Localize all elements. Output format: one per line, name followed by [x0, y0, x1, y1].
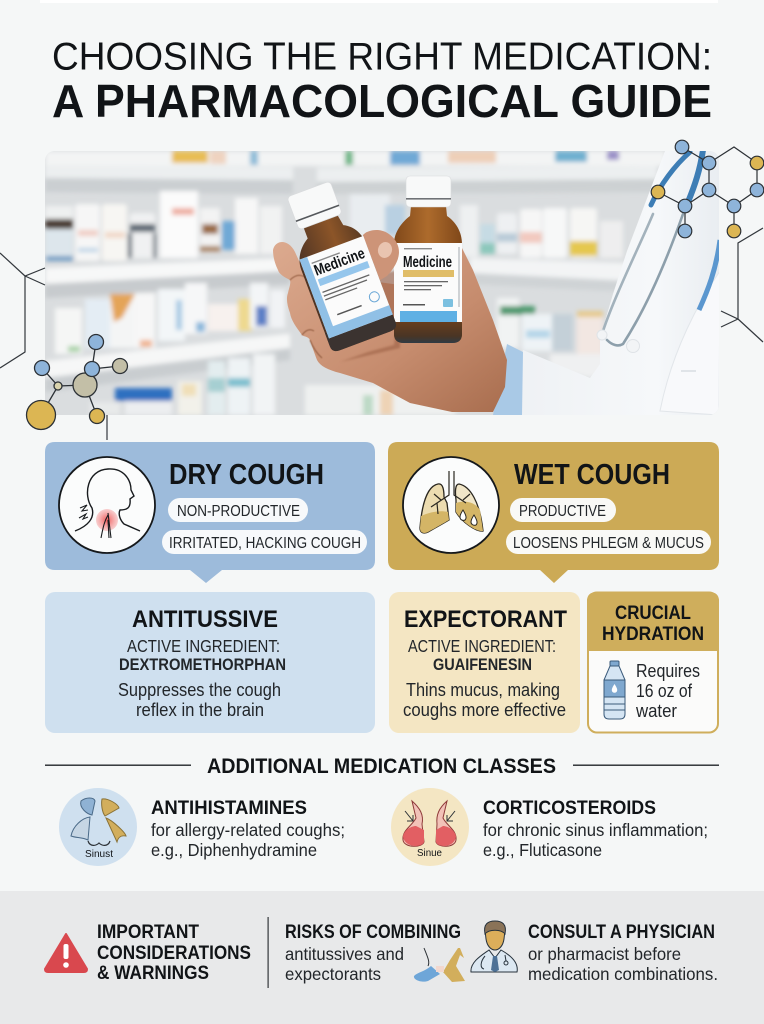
- icon: sinus, blue: [59, 788, 137, 866]
- warning heading: IMPORTANT: [97, 922, 199, 943]
- panel: antitussive: [45, 592, 375, 733]
- molecule lines right: [721, 228, 763, 342]
- title: A PHARMACOLOGICAL GUIDE: [52, 75, 712, 127]
- risks of combining: antitussives and: [285, 944, 404, 964]
- heading: dry cough: DRY COUGH: [169, 459, 324, 491]
- heading: crucial hydration: CRUCIAL: [615, 603, 691, 624]
- pill: productive: PRODUCTIVE: [519, 503, 606, 520]
- item: antihistamines: [59, 788, 345, 866]
- thumb: [363, 230, 399, 280]
- corticosteroids text: e.g., Fluticasone: [483, 840, 602, 860]
- pill: non-productive: [168, 498, 308, 522]
- icon: sinus, blue: Sinust: [85, 849, 113, 860]
- title: [52, 36, 712, 127]
- molecule lines left: [0, 253, 107, 440]
- active ingredient: dextromethorphan: [119, 636, 286, 674]
- medicine bottle, upright: [394, 176, 462, 343]
- medicine bottle, tilted: [288, 182, 396, 352]
- risks of combining: [285, 922, 461, 984]
- description: Suppresses the cough: [118, 680, 281, 700]
- active ingredient: guaifenesin: [408, 636, 556, 674]
- antihistamines text: ANTIHISTAMINES: [151, 798, 307, 819]
- icon: combining arrows: [414, 948, 465, 982]
- icon: water bottle: [604, 661, 625, 719]
- description: Thins mucus, making: [406, 680, 560, 700]
- molecule: left cluster: [26, 334, 128, 430]
- medicine bottle, upright: Medicine: [403, 254, 452, 271]
- hero photo: pharmacist holding two medicine bottles: [45, 150, 720, 415]
- icon: physician: [471, 921, 517, 972]
- pill: non-productive: NON-PRODUCTIVE: [177, 503, 300, 520]
- panel: expectorant: [389, 592, 580, 733]
- antihistamines text: [151, 798, 345, 860]
- description: reflex in the brain: [136, 700, 264, 720]
- icon: sinus, inflamed: Sinue: [417, 848, 442, 859]
- corticosteroids text: CORTICOSTEROIDS: [483, 798, 656, 819]
- hand: [273, 242, 507, 412]
- active ingredient: dextromethorphan: ACTIVE INGREDIENT:: [127, 636, 280, 656]
- panel: wet cough: [388, 442, 719, 583]
- pill: loosens phlegm and mucus: [506, 530, 711, 554]
- pill: productive: [510, 498, 616, 522]
- heading: antitussive: ANTITUSSIVE: [132, 606, 278, 633]
- consult a physician: CONSULT A PHYSICIAN: [528, 922, 715, 943]
- antihistamines text: for allergy-related coughs;: [151, 820, 345, 840]
- pill: irritated, hacking cough: IRRITATED, HACKING COUGH: [169, 535, 361, 552]
- warning heading: [97, 922, 251, 984]
- description: [403, 680, 566, 720]
- risks of combining: RISKS OF COMBINING: [285, 922, 461, 943]
- doctor coat: [493, 151, 720, 415]
- panel: crucial hydration: [587, 592, 719, 732]
- molecule: top right cluster: [651, 140, 764, 238]
- icon: lungs: [403, 457, 499, 553]
- medicine bottle, tilted: Medicine: [312, 245, 368, 280]
- icon: warning triangle: [45, 934, 87, 972]
- icon: throat irritation: [59, 457, 155, 553]
- active ingredient: guaifenesin: GUAIFENESIN: [433, 655, 532, 674]
- antihistamines text: e.g., Diphenhydramine: [151, 840, 317, 860]
- hydration text: [635, 661, 700, 721]
- description: coughs more effective: [403, 700, 566, 720]
- heading: wet cough: WET COUGH: [514, 459, 670, 491]
- heading: crucial hydration: [602, 603, 704, 645]
- corticosteroids text: [483, 798, 708, 860]
- heading: expectorant: EXPECTORANT: [404, 606, 567, 633]
- item: corticosteroids: [391, 788, 708, 866]
- section heading: additional medication classes: ADDITIONAL MEDICATION CLASSES: [207, 755, 556, 778]
- consult a physician: or pharmacist before: [528, 944, 681, 964]
- warning heading: CONSIDERATIONS: [97, 943, 251, 964]
- consult a physician: medication combinations.: [528, 964, 718, 984]
- hydration text: Requires: [636, 661, 700, 681]
- hydration text: water: [635, 701, 677, 721]
- risks of combining: expectorants: [285, 964, 381, 984]
- hydration text: 16 oz of: [636, 681, 693, 701]
- icon: sinus, inflamed: [391, 788, 469, 866]
- pill: irritated, hacking cough: [162, 530, 367, 554]
- description: [118, 680, 281, 720]
- consult a physician: [528, 922, 718, 984]
- panel: dry cough: [45, 442, 375, 583]
- heading: crucial hydration: HYDRATION: [602, 624, 704, 645]
- corticosteroids text: for chronic sinus inflammation;: [483, 820, 708, 840]
- active ingredient: guaifenesin: ACTIVE INGREDIENT:: [408, 636, 556, 656]
- stethoscope: [597, 150, 703, 352]
- panel: warnings footer: [0, 891, 764, 1024]
- pill: loosens phlegm and mucus: LOOSENS PHLEGM & MUCUS: [513, 535, 704, 552]
- title: CHOOSING THE RIGHT MEDICATION:: [52, 36, 712, 78]
- active ingredient: dextromethorphan: DEXTROMETHORPHAN: [119, 655, 286, 674]
- warning heading: & WARNINGS: [97, 963, 209, 984]
